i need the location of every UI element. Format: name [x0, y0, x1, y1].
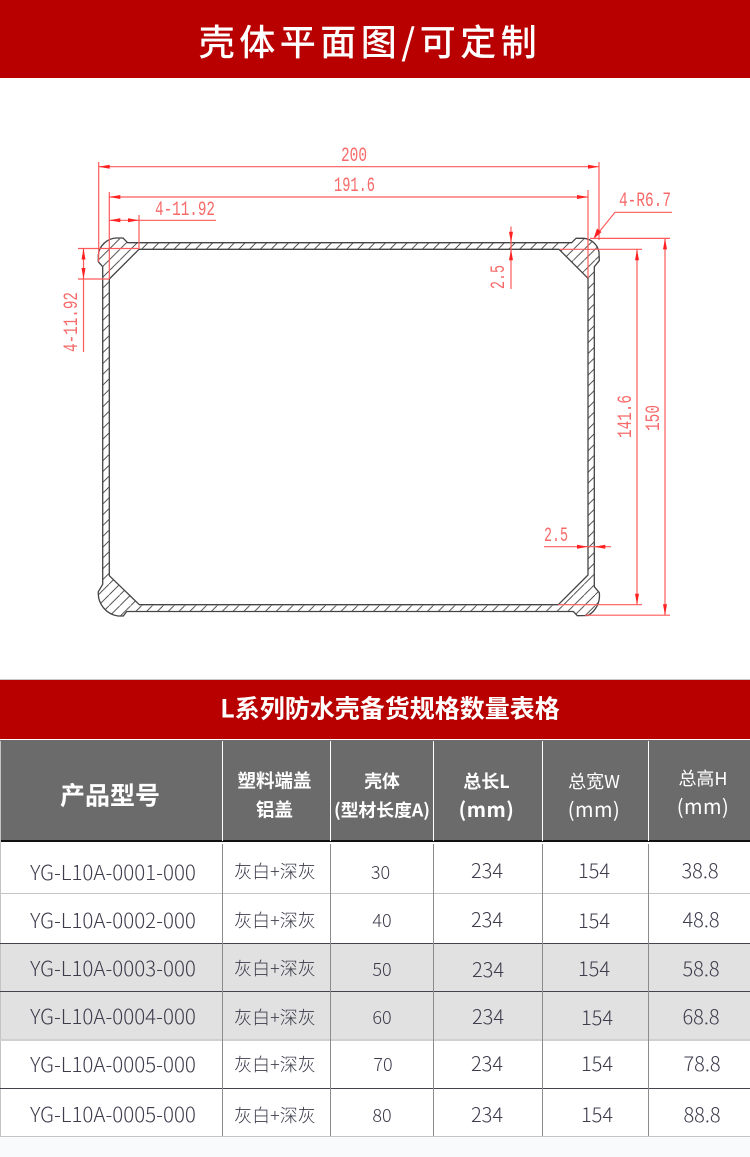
dimension: 2.5 top wall	[488, 226, 513, 289]
text: 50	[372, 956, 392, 982]
text: YG-L10A-0002-000	[30, 904, 196, 934]
dimension: 4-11.92 vertical	[61, 248, 139, 352]
table footer tint	[0, 1137, 750, 1157]
dimension: 4-11.92 horizontal	[109, 199, 216, 249]
text: YG-L10A-0005-000	[30, 1048, 196, 1078]
row 1	[30, 855, 719, 886]
text: 78.8	[683, 1048, 721, 1077]
header: length: 总长L	[463, 768, 510, 794]
title: 壳体平面图/可定制	[199, 14, 541, 66]
technical drawing: enclosure cross-section	[61, 145, 672, 617]
callout: 4-R6.7	[594, 190, 672, 239]
title banner	[0, 0, 750, 78]
dimension: 191.6: 191.6	[334, 175, 375, 198]
text: 88.8	[683, 1099, 721, 1128]
header: product model: 产品型号	[60, 776, 160, 812]
header: end cover: 塑料端盖	[237, 768, 312, 794]
text: 234	[471, 1099, 503, 1128]
header: height: (mm)	[677, 791, 729, 820]
text: 154	[578, 905, 610, 934]
text: 154	[581, 1002, 613, 1031]
table title bar	[0, 679, 750, 739]
text: 灰白+深灰	[234, 1051, 316, 1077]
header: length: (mm)	[459, 794, 514, 823]
row 5	[30, 1048, 721, 1078]
text: 234	[472, 1001, 504, 1030]
dimension: 4-11.92 vertical: 4-11.92	[61, 292, 84, 352]
text: 234	[471, 904, 503, 933]
header: width	[568, 768, 620, 823]
header: shell	[334, 768, 430, 822]
header: length	[459, 768, 514, 823]
header: width: (mm)	[568, 794, 620, 823]
text: 154	[581, 1048, 613, 1077]
text: 68.8	[682, 1001, 720, 1030]
table header row	[0, 740, 750, 842]
text: YG-L10A-0005-000	[30, 1098, 196, 1128]
dimension: 4-11.92 horizontal: 4-11.92	[155, 199, 215, 222]
text: 灰白+深灰	[234, 1102, 316, 1128]
shaded rows background	[0, 944, 750, 1040]
dimension: 191.6	[109, 175, 588, 279]
dimension: 2.5 right wall: 2.5	[544, 525, 568, 548]
header: height: 总高H	[678, 765, 728, 791]
callout: 4-R6.7: 4-R6.7	[619, 190, 671, 213]
text: 60	[372, 1004, 392, 1030]
table grid lines	[0, 741, 750, 1137]
text: 154	[578, 953, 610, 982]
enclosure profile	[98, 238, 599, 616]
text: 48.8	[682, 904, 720, 933]
table title: L系列防水壳备货规格数量表格	[220, 690, 560, 726]
header: width: 总宽W	[568, 768, 620, 794]
text: 154	[578, 855, 610, 884]
dimension: 2.5 right wall	[544, 525, 611, 549]
text: 234	[471, 855, 503, 884]
dimension: 150: 150	[643, 405, 666, 431]
text: 58.8	[682, 953, 720, 982]
row 3	[30, 952, 720, 983]
dimension: 200: 200	[341, 145, 367, 168]
text: 灰白+深灰	[234, 1004, 316, 1030]
row 2	[30, 904, 720, 934]
dimension lines	[61, 145, 672, 615]
text: 70	[373, 1051, 393, 1077]
dimension: 200	[99, 145, 599, 262]
text: 154	[581, 1099, 613, 1128]
header: end cover	[237, 768, 312, 822]
text: YG-L10A-0004-000	[30, 1000, 196, 1030]
header: shell: 壳体	[364, 768, 400, 794]
text: YG-L10A-0003-000	[30, 952, 196, 982]
dimension: 141.6	[558, 249, 642, 605]
dimension: 141.6: 141.6	[615, 395, 638, 438]
header: height	[677, 765, 729, 820]
header: shell: (型材长度A)	[334, 796, 430, 822]
text: 80	[372, 1102, 392, 1128]
text: 38.8	[681, 855, 719, 884]
text: 234	[472, 954, 504, 983]
text: 40	[372, 907, 392, 933]
header: end cover: 铝盖	[256, 796, 293, 822]
text: 234	[471, 1048, 503, 1077]
row 4	[30, 1000, 720, 1031]
dimension: 150	[585, 238, 670, 615]
text: 灰白+深灰	[234, 955, 316, 981]
text: YG-L10A-0001-000	[30, 856, 196, 886]
text: 灰白+深灰	[234, 858, 316, 884]
text: 30	[371, 859, 390, 885]
dimension: 2.5 top wall: 2.5	[488, 265, 511, 289]
row 6	[30, 1098, 721, 1128]
text: 灰白+深灰	[234, 907, 316, 933]
